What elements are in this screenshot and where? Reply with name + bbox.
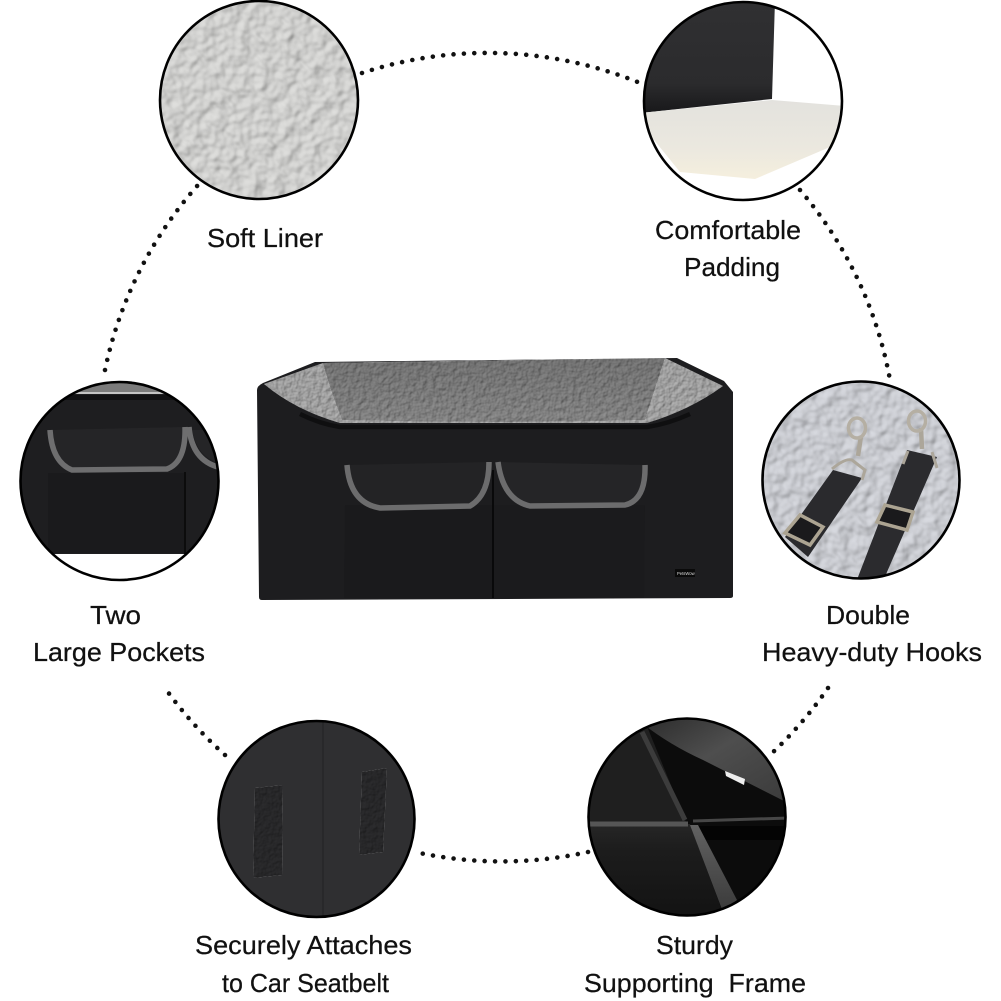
left pocket flap — [347, 462, 489, 508]
lower pocket panels — [344, 505, 492, 598]
seat rim — [300, 414, 690, 427]
icon: foam pad — [645, 3, 840, 179]
label: double heavy-duty hooks: Double — [826, 600, 910, 630]
label: sturdy supporting frame — [584, 930, 806, 998]
label: double heavy-duty hooks — [762, 600, 982, 667]
icon: internal frame — [590, 720, 784, 914]
feature: double heavy-duty hooks — [758, 378, 982, 667]
brand tag — [675, 569, 696, 577]
icon: straps and hooks — [764, 382, 958, 578]
centre pocket seam — [492, 470, 494, 598]
label: comfortable padding: Comfortable — [655, 215, 801, 245]
icon: pocket close-up — [22, 383, 218, 554]
seat side lining — [264, 358, 723, 423]
right pocket flap — [498, 462, 645, 506]
central product: pet car seat — [257, 358, 733, 600]
label: soft liner: Soft Liner — [207, 223, 323, 253]
label: sturdy supporting frame: Sturdy — [656, 930, 733, 960]
label: double heavy-duty hooks: Heavy-duty Hooks — [762, 637, 982, 667]
label: sturdy supporting frame: Supporting Frame — [584, 968, 806, 998]
feature: comfortable padding — [640, 0, 846, 282]
feature: soft liner — [155, 0, 365, 253]
seat body — [257, 358, 733, 600]
feature: sturdy supporting frame — [584, 714, 806, 998]
label: comfortable padding — [655, 215, 801, 282]
label: securely attaches to car seatbelt — [195, 930, 412, 998]
label: securely attaches to car seatbelt: to Car Seatbelt — [222, 968, 390, 998]
label: two large pockets — [33, 600, 205, 667]
brand tag: PetsWow — [677, 571, 696, 576]
icon: velcro straps — [220, 722, 414, 916]
label: two large pockets: Large Pockets — [33, 637, 205, 667]
label: comfortable padding: Padding — [684, 252, 780, 282]
icon: fleece swatch — [161, 2, 357, 198]
feature: two large pockets — [16, 378, 224, 667]
dotted ring connecting the feature circles — [105, 53, 890, 861]
seat back lining — [323, 358, 665, 422]
label: securely attaches to car seatbelt: Securely Attaches — [195, 930, 412, 960]
feature: securely attaches to car seatbelt — [195, 716, 420, 998]
label: two large pockets: Two — [90, 600, 141, 630]
